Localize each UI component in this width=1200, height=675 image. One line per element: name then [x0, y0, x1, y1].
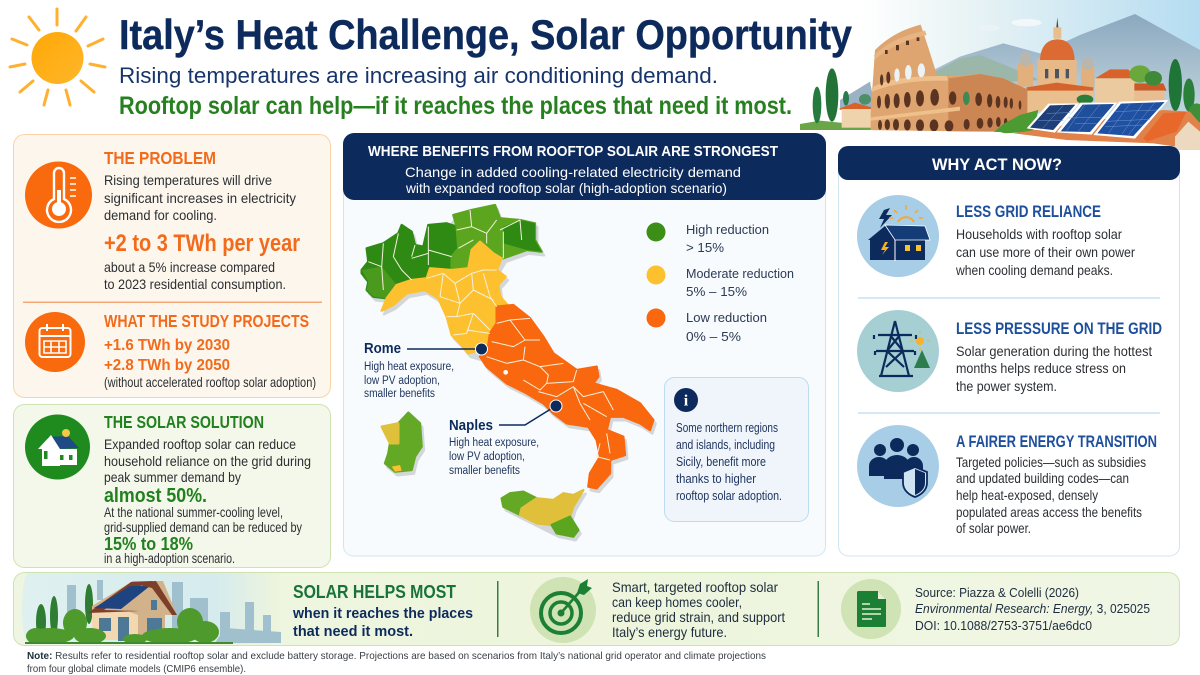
- footnote: [27, 650, 766, 675]
- icon: transmission tower: [857, 310, 939, 392]
- callout: Rome: [364, 341, 488, 400]
- footnote: from four global climate models (CMIP6 ensemble).: [27, 663, 246, 675]
- message text: [292, 605, 473, 640]
- projections: +2.8 TWh by 2050: [104, 357, 230, 374]
- callout: Rome: High heat exposure,: [364, 361, 454, 373]
- callout: Naples: [449, 400, 562, 477]
- icon: target with arrow: [530, 577, 596, 643]
- solution text: [104, 436, 311, 485]
- item: less pressure on the grid: months helps reduce stress on: [956, 360, 1126, 376]
- item: a fairer energy transition: Targeted policies—such as subsidies: [956, 454, 1146, 470]
- region: Sicily: [502, 490, 583, 537]
- scenario note: in a high-adoption scenario.: [104, 550, 235, 566]
- legend: 5% – 15%: [686, 284, 747, 299]
- source citation: DOI: 10.1088/2753-3751/ae6dc0: [915, 619, 1092, 633]
- item: less pressure on the grid: Solar generation during the hottest: [956, 343, 1152, 359]
- callout: Rome: Rome: [364, 341, 401, 357]
- stat: 15% to 18%: 15% to 18%: [104, 533, 193, 554]
- message: smart targeted solar: can keep homes cooler,: [612, 594, 742, 610]
- heading: what the study projects: WHAT THE STUDY PROJECTS: [104, 311, 309, 331]
- map header: [343, 133, 826, 200]
- info text: Some northern regions: [676, 421, 778, 435]
- item: a fairer energy transition: [857, 425, 1157, 536]
- header illustration: Italian skyline with solar panels: [800, 0, 1200, 150]
- source citation: Source: Piazza & Colelli (2026): [915, 586, 1079, 600]
- problem text: Rising temperatures will drive: [104, 172, 272, 188]
- callout: Naples: low PV adoption,: [449, 451, 525, 463]
- map header: Change in added cooling-related electricity demand: [405, 164, 741, 180]
- icon: sun: [10, 9, 105, 105]
- info box: [664, 378, 808, 522]
- item: a fairer energy transition: and updated building codes—can: [956, 470, 1129, 486]
- callout: Rome: low PV adoption,: [364, 375, 440, 387]
- info text: Sicily, benefit more: [676, 455, 766, 469]
- why act now header: [838, 146, 1180, 180]
- region: Sardinia: [382, 413, 422, 472]
- heading: solar helps most: SOLAR HELPS MOST: [293, 581, 457, 602]
- source citation: [915, 586, 1150, 633]
- projections: [104, 337, 230, 374]
- panel: the solar solution: [14, 404, 330, 568]
- icon: info: [674, 388, 698, 412]
- bottom band: [14, 572, 1180, 646]
- info text: thanks to higher: [676, 472, 756, 486]
- legend: [646, 222, 794, 344]
- region: low reduction: [480, 305, 653, 488]
- legend: > 15%: [686, 240, 724, 255]
- problem text: [104, 172, 296, 223]
- stat note: about a 5% increase compared: [104, 259, 275, 275]
- stat: almost 50%: almost 50%.: [104, 484, 207, 507]
- icon: info: i: [684, 392, 689, 410]
- problem text: significant increases in electricity: [104, 190, 296, 206]
- panel: why act now: [838, 146, 1180, 556]
- region: moderate reduction: [382, 242, 508, 353]
- source citation: Environmental Research: Energy, 3, 025025: [915, 602, 1150, 616]
- message text: when it reaches the places: [292, 605, 473, 622]
- icon: house with solar: [25, 414, 90, 480]
- projections: +1.6 TWh by 2030: [104, 337, 230, 354]
- solution text: Expanded rooftop solar can reduce: [104, 436, 296, 452]
- icon: thermometer: [25, 162, 92, 228]
- panel: the problem and study projections: [14, 134, 330, 398]
- item: a fairer energy transition: help heat-exposed, densely: [956, 487, 1098, 503]
- item: less pressure on the grid: [857, 310, 1162, 394]
- map shadow: [364, 209, 656, 540]
- item: less grid reliance: Households with rooftop solar: [956, 226, 1122, 242]
- info text: rooftop solar adoption.: [676, 489, 782, 503]
- item: less grid reliance: LESS GRID RELIANCE: [956, 203, 1101, 221]
- stat: TWh per year: +2 to 3 TWh per year: [104, 230, 300, 257]
- solution text: peak summer demand by: [104, 469, 241, 485]
- projection caveat: (without accelerated rooftop solar adoption): [104, 374, 316, 390]
- item: a fairer energy transition: populated areas access the benefits: [956, 504, 1142, 520]
- choropleth map of Italy: [362, 205, 656, 540]
- icon: solar house: [857, 195, 939, 277]
- national level text: [104, 504, 302, 535]
- solution text: household reliance on the grid during: [104, 453, 311, 469]
- legend: 0% – 5%: [686, 329, 741, 344]
- icon: document: [841, 579, 901, 639]
- item: less grid reliance: when cooling demand peaks.: [955, 262, 1113, 278]
- stat note: [104, 259, 286, 292]
- legend: High reduction: [686, 222, 769, 237]
- item: less grid reliance: can use more of their own power: [956, 244, 1135, 260]
- icon: calendar: [25, 312, 85, 372]
- map header: WHERE BENEFITS FROM ROOFTOP SOLAIR ARE STRONGEST: [368, 143, 778, 160]
- stat note: to 2023 residential consumption.: [104, 276, 286, 292]
- item: less grid reliance: [857, 195, 1135, 278]
- problem text: demand for cooling.: [104, 207, 217, 223]
- callout: Naples: smaller benefits: [449, 465, 520, 477]
- national level text: At the national summer-cooling level,: [104, 504, 283, 520]
- legend: Low reduction: [686, 310, 767, 325]
- subtitle line 1: Rising temperatures are increasing air conditioning demand.: [119, 63, 718, 88]
- illustration: house with rooftop solar and city: [22, 573, 281, 644]
- callout: Rome: smaller benefits: [364, 388, 435, 400]
- message text: that need it most.: [293, 623, 413, 640]
- heading: the solar solution: THE SOLAR SOLUTION: [104, 412, 264, 432]
- legend: Moderate reduction: [686, 266, 794, 281]
- info text: and islands, including: [676, 438, 775, 452]
- message: smart targeted solar: Smart, targeted rooftop solar: [612, 579, 778, 595]
- national level text: grid-supplied demand can be reduced by: [104, 519, 302, 535]
- region: high reduction northwest: [362, 223, 458, 298]
- subtitle line 2: Rooftop solar can help—if it reaches the places that need it most.: [119, 92, 792, 120]
- title: Italy’s Heat Challenge, Solar Opportunity: [119, 11, 853, 58]
- message: smart targeted solar: Italy’s energy future.: [612, 624, 727, 640]
- item: less pressure on the grid: LESS PRESSURE ON THE GRID: [956, 320, 1162, 338]
- icon: people with shield: [857, 425, 939, 507]
- heading: the problem: THE PROBLEM: [104, 148, 216, 168]
- callout: Naples: High heat exposure,: [449, 437, 539, 449]
- item: less pressure on the grid: the power system.: [956, 378, 1057, 394]
- region: high reduction northeast: [452, 205, 542, 270]
- message: smart targeted solar: reduce grid strain, and support: [612, 609, 785, 625]
- info text: [676, 421, 782, 503]
- why act now header: WHY ACT NOW?: [932, 156, 1062, 174]
- footnote: Note: Results refer to residential rooftop solar and exclude battery storage. Projections are based on scenarios from Italy’s national grid operator and climate projections: [27, 650, 766, 662]
- message: smart targeted solar: [612, 579, 785, 640]
- map header: with expanded rooftop solar (high-adoption scenario): [405, 180, 727, 196]
- callout: Naples: Naples: [449, 418, 493, 434]
- panel: map of benefits: [343, 133, 826, 556]
- item: a fairer energy transition: of solar power.: [956, 520, 1031, 536]
